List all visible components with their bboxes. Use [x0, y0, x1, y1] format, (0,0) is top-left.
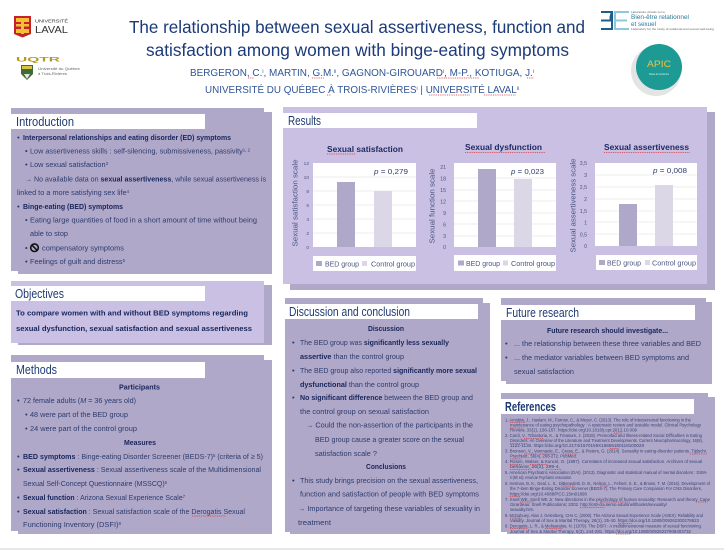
methods text: •: [25, 424, 28, 433]
authors and affiliations: i: [533, 69, 534, 75]
authors and affiliations: i: [443, 69, 444, 75]
references list: Validity. Journal of Sex & Marital Therapy, 26(1), 25-40. https://doi.org/10.1080/009262300278623: [510, 518, 699, 524]
panel: introduction: [11, 108, 272, 274]
chart: sexual dysfunction: 3: [443, 234, 446, 240]
references list: https://doi.org/10.4088/PCC.15m01896: [510, 492, 587, 498]
logo: Université Laval: LAVAL: [35, 25, 68, 36]
methods text: Sexual satisfaction : Sexual satisfaction scale of the Derogatis Sexual: [23, 507, 245, 516]
conclusions text: •: [292, 476, 295, 485]
introduction text: Binge-eating (BED) symptoms: [23, 202, 123, 211]
conclusions text: This study brings precision on the sexual assertiveness,: [300, 476, 478, 485]
discussion text: [292, 324, 477, 458]
methods text: Participants: [119, 383, 160, 392]
logo: Bien-être relationnel et sexuel: [601, 11, 715, 31]
discussion text: satisfaction scale ?: [315, 449, 377, 458]
chart: sexual assertiveness: 0: [584, 244, 587, 250]
objectives text: To compare women with and without BED symptoms regarding: [16, 309, 248, 318]
chart: sexual satisfaction: p = 0,279: [373, 167, 408, 176]
chart: sexual dysfunction: Sexual function scale: [428, 168, 436, 244]
introduction text: 3: [106, 161, 108, 166]
discussion text: •: [292, 366, 295, 375]
chart: sexual dysfunction: [428, 143, 556, 271]
logo: Université Laval: UNIVERSITÉ: [35, 18, 68, 24]
panel: future research: [501, 298, 712, 384]
panel: methods: [11, 355, 272, 534]
chart: sexual assertiveness: 1: [584, 220, 587, 226]
authors and affiliations: , GAGNON-GIROUARD: [336, 67, 443, 79]
chart: sexual satisfaction: 12: [304, 161, 309, 167]
logo: Bien-être relationnel et sexuel: Laboratoire d'étude sur le: [631, 11, 666, 14]
chart: sexual dysfunction: BED group: [466, 261, 500, 268]
logo: APIC: Pause de recherche: [649, 73, 670, 76]
logo: UQTR: [16, 56, 80, 80]
authors and affiliations: i: [417, 86, 418, 92]
conclusions text: treatment: [298, 518, 332, 527]
conclusions text: function and satisfaction of people with BED symptoms: [300, 490, 479, 498]
authors and affiliations: BERGERON, C.: [190, 67, 266, 79]
logo: Bien-être relationnel et sexuel: et sexuel: [631, 22, 656, 28]
future research text: ... the relationship between these three variables and BED: [514, 339, 701, 348]
discussion text: assertive than the control group: [300, 352, 404, 361]
chart: sexual dysfunction: 18: [440, 176, 446, 182]
methods text: Measures: [124, 438, 156, 447]
chart: sexual dysfunction: Control group: [511, 261, 555, 268]
discussion text: BED group cause a greater score on the sexual: [315, 435, 464, 444]
chart: sexual dysfunction: 6: [443, 222, 446, 228]
introduction text: •: [17, 202, 20, 211]
introduction text: compensatory symptoms: [42, 244, 124, 253]
logo: UQTR: à Trois-Rivières: [38, 72, 67, 76]
methods text: Sexual Self-Concept Questionnaire (MSSCQ): [23, 479, 177, 488]
introduction text: → No available data on sexual assertiveness, while sexual assertiveness is: [25, 175, 266, 184]
methods text: •: [25, 410, 28, 419]
panel: results: [283, 107, 715, 290]
chart: sexual satisfaction: 6: [306, 203, 309, 209]
chart: sexual satisfaction: 4: [306, 217, 309, 223]
methods text: 7: [183, 494, 185, 499]
future research text: sexual satisfaction: [514, 367, 574, 376]
future research text: •: [505, 339, 508, 348]
chart: sexual satisfaction: 10: [304, 175, 309, 181]
references list: Review, 33(1), 156-167. https://doi.org/10.1016/j.cpr.2012.10.009: [510, 428, 637, 434]
references list: Journal of Sex & Marital Therapy, 5(3), 244-281. https://doi.org/10.1080/00926237908403732: [510, 529, 691, 535]
chart: sexual assertiveness: p = 0,008: [652, 166, 687, 175]
references list: Girardeau: Snell Publications; 2002. http://cstl-cla.semo.edu/snell/books/sexuality/: [510, 502, 668, 508]
future research text: ... the mediator variables between BED symptoms and: [514, 353, 689, 362]
title: [129, 17, 585, 60]
methods text: 8: [119, 521, 121, 526]
references list: maintenance of eating psychopathology : A systematic review and testable model. Clinical Psychology: [510, 422, 702, 428]
references list: 5 (5th ed). American Psychiatric Association.: [510, 475, 572, 481]
authors and affiliations: , MARTIN, G.M.: [264, 67, 334, 79]
logo: Bien-être relationnel et sexuel: Laboratory for the study of relational and sexual well-being: [631, 28, 715, 31]
authors and affiliations: , M-P., KOTIUGA, J.: [444, 67, 533, 79]
discussion text: The BED group also reported significantly more sexual: [300, 366, 477, 375]
authors and affiliations: ii: [517, 86, 519, 92]
chart: sexual dysfunction: 0: [443, 245, 446, 251]
chart: sexual assertiveness: [568, 143, 697, 270]
title: satisfaction among women with binge-eating symptoms: [146, 40, 569, 60]
chart: sexual satisfaction: 0: [306, 245, 309, 251]
chart: sexual assertiveness: 0,5: [580, 232, 587, 238]
logo: Bien-être relationnel et sexuel: Bien-être relationnel: [631, 15, 689, 21]
logo: Université Laval: [14, 16, 68, 38]
authors and affiliations: UNIVERSITÉ DU QUÉBEC À TROIS-RIVIÈRES: [205, 84, 431, 96]
methods text: Sexual assertiveness : Sexual assertiveness scale of the Multidimensional: [23, 465, 261, 474]
heading: references: [501, 399, 694, 414]
references list: behavior, 26(2), 299-4.: [510, 464, 560, 470]
chart: sexual satisfaction: Sexual satisfaction scale: [290, 159, 300, 246]
heading: introduction: Introduction: [16, 115, 74, 129]
chart: sexual assertiveness: 2: [584, 197, 587, 203]
introduction text: Low assertiveness skills : self-silencing, submissiveness, passivity: [30, 147, 252, 156]
chart: sexual satisfaction: Sexual satisfaction: [327, 145, 403, 154]
objectives text: [16, 309, 252, 333]
authors and affiliations: | UNIVERSITÉ LAVAL: [418, 83, 517, 96]
chart: sexual assertiveness: Sexual assertiveness scale: [568, 158, 578, 252]
chart: sexual dysfunction: 9: [443, 211, 446, 217]
chart: sexual satisfaction: 2: [306, 231, 309, 237]
methods text: •: [17, 465, 20, 474]
introduction text: Interpersonal relationships and eating disorder (ED) symptoms: [23, 133, 231, 142]
conclusions text: Conclusions: [366, 462, 406, 471]
discussion text: dysfunctional than the control group: [300, 380, 419, 389]
objectives text: sexual dysfunction, sexual satisfaction and sexual assertiveness: [16, 324, 252, 333]
future research text: Future research should investigate...: [547, 326, 668, 335]
future research text: [505, 326, 701, 376]
methods text: 72 female adults (M = 36 years old): [23, 396, 136, 405]
introduction text: Feelings of guilt and distress: [30, 257, 126, 266]
introduction text: •: [25, 257, 28, 266]
introduction text: •: [25, 244, 28, 253]
chart: sexual satisfaction: 8: [306, 189, 309, 195]
heading: results: [283, 113, 477, 128]
discussion text: The BED group was significantly less sexually: [300, 338, 450, 347]
methods text: 6: [165, 480, 167, 485]
chart: sexual satisfaction: [290, 145, 416, 271]
chart: sexual assertiveness: 2,5: [580, 185, 587, 191]
chart: sexual assertiveness: 3,5: [580, 161, 587, 167]
introduction text: [17, 133, 266, 266]
heading: objectives: Objectives: [15, 287, 64, 301]
chart: sexual dysfunction: 12: [440, 200, 446, 206]
methods text: Functioning Inventory (DSFI): [23, 520, 120, 529]
methods text: •: [17, 507, 20, 516]
references list: 1122-1130. https://doi.org/10.2174/1570159X16666180118100028: [510, 443, 644, 449]
methods text: 5: [213, 453, 216, 458]
logo: UQTR: UQTR: [16, 56, 61, 64]
logo: APIC: APIC: [647, 59, 672, 69]
chart: sexual assertiveness: BED group: [607, 260, 641, 268]
future research text: •: [505, 353, 508, 362]
chart: sexual satisfaction: Control group: [371, 262, 415, 268]
references list: 4. Rosen, Walser, & Kuncel, O. (1997). Correlates of increased sexual satisfaction. Archives of sexual: [505, 459, 702, 465]
discussion text: No significant difference between the BED group and: [300, 393, 473, 402]
heading: methods: [11, 362, 205, 378]
methods text: 24 were part of the control group: [30, 424, 137, 433]
introduction text: •: [25, 147, 28, 156]
conclusions text: [292, 462, 480, 527]
methods text: 48 were part of the BED group: [30, 410, 128, 419]
references list: sexuality.htm.: [510, 507, 534, 513]
panel: references: [501, 393, 715, 535]
introduction text: Low sexual satisfaction: [30, 160, 108, 169]
chart: sexual dysfunction: 21: [440, 165, 446, 171]
chart: sexual satisfaction: BED group: [325, 262, 359, 268]
heading: future research: Future research: [506, 306, 579, 320]
heading: references: References: [505, 400, 556, 414]
references list: Psychiatr., 56(4), 268-272. PubMed.: [510, 454, 577, 460]
logo: APIC: [631, 44, 682, 96]
introduction text: 1, 2: [243, 148, 250, 153]
heading: objectives: [11, 286, 205, 301]
chart: sexual dysfunction: p = 0,023: [510, 167, 544, 176]
conclusions text: → Importance of targeting these variables of sexuality in: [298, 504, 480, 513]
introduction text: •: [17, 133, 20, 142]
introduction text: •: [25, 160, 28, 169]
discussion text: •: [292, 338, 295, 347]
panel: objectives: [11, 281, 272, 345]
introduction text: 5: [123, 258, 125, 263]
introduction text: 4: [127, 189, 129, 194]
discussion text: •: [292, 393, 295, 402]
heading: introduction: [11, 114, 205, 129]
introduction text: •: [25, 216, 28, 225]
heading: discussion and conclusion: Discussion and conclusion: [289, 305, 410, 319]
chart: sexual assertiveness: 3: [584, 173, 587, 179]
chart: sexual assertiveness: Control group: [652, 260, 696, 268]
chart: sexual assertiveness: 1,5: [580, 209, 587, 215]
methods text: •: [17, 452, 20, 461]
methods text: Sexual function : Arizona Sexual Experience Scale: [23, 493, 193, 502]
heading: future research: [501, 305, 695, 320]
discussion text: → Could the non-assertion of the participants in the: [306, 420, 473, 430]
methods text: [17, 383, 263, 529]
chart: sexual assertiveness: Sexual assertiveness: [604, 143, 690, 152]
panel: discussion and conclusion: [285, 298, 490, 534]
introduction text: able to stop: [30, 229, 68, 238]
discussion text: Discussion: [368, 324, 404, 333]
introduction text: Eating large quantities of food in a short amount of time without being: [30, 216, 257, 225]
introduction text: linked to a more satisfying sex life: [17, 188, 131, 197]
methods text: BED symptoms : Binge-eating Disorder Screener (BEDS-7): [23, 452, 223, 461]
logo: UQTR: Université du Québec: [38, 67, 80, 71]
discussion text: the control group on sexual satisfaction: [300, 407, 429, 416]
authors and affiliations: i: [262, 69, 264, 75]
methods text: (criteria of ≥ 5): [215, 452, 263, 461]
references list: [505, 418, 711, 535]
title: The relationship between sexual assertiveness, function and: [129, 17, 585, 37]
authors and affiliations: ii: [334, 69, 336, 75]
methods text: •: [17, 493, 20, 502]
references list: 1. Arnsbiw, J., Haslam, M., Farrow, C., & Meyer, C. (2013). The role of interpersonal functioning in the: [505, 418, 691, 424]
methods text: •: [17, 396, 20, 405]
heading: results: Results: [288, 114, 321, 128]
heading: methods: Methods: [16, 363, 57, 377]
chart: sexual dysfunction: 15: [440, 188, 446, 194]
authors and affiliations: [190, 67, 534, 96]
chart: sexual dysfunction: Sexual dysfunction: [465, 143, 542, 152]
